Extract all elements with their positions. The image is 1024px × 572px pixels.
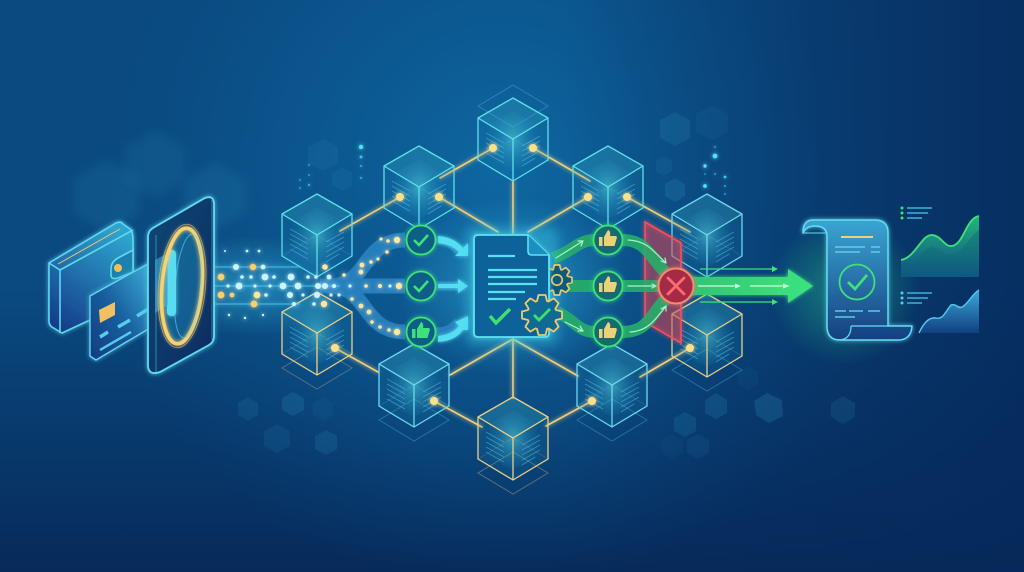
glow along data stream [140,236,360,336]
arrows toward document [438,236,468,342]
blockchain cube: lower left [379,344,449,441]
blockchain cube: outer upper left [282,194,352,277]
icon: document check [490,309,510,323]
icon: payment card [90,260,155,360]
rising data particles: right [703,146,726,195]
payment terminal with gold ring [148,197,214,373]
wallet and card illustration [49,222,155,360]
approval badge: thumbs up 2 [594,272,622,300]
blockchain cube: upper left [384,146,454,229]
blockchain cube: outer upper right [672,194,742,277]
document glow [466,227,558,345]
gold ring [157,226,207,346]
icon: wallet [49,222,133,333]
document [474,235,549,337]
small path arrows [556,240,666,332]
blockchain cube: outer lower left (gold) [282,292,352,389]
icon: receipt check [840,264,874,300]
blue area chart with legend [900,290,979,333]
green glow behind receipt [770,215,920,365]
data particle stream [178,237,402,335]
small gear [542,265,572,295]
side arrows [700,266,778,305]
blockchain cube: upper right [573,146,643,229]
red rejection barrier [645,222,681,343]
network nodes [331,144,694,405]
blockchain cube: lower right [577,344,647,441]
blockchain cube: top [478,85,548,181]
receipt text lines [835,247,880,317]
blockchain cube: bottom (gold) [478,397,548,494]
incoming blue data paths [320,240,458,332]
receipt heading line [841,236,873,238]
approval badge: thumbs up 3 [594,318,622,346]
network connection lines [335,148,690,427]
receipt scroll [803,220,912,340]
text lines [488,256,537,299]
terminal body [148,197,214,373]
main green output arrow [676,266,813,305]
validation badge: check 2 [406,272,436,300]
light beam [167,250,176,316]
approval badge: thumbs up 1 [594,226,622,254]
green approved paths [553,240,672,332]
decorative hexagon field [74,105,855,459]
validation badge: thumbs up green [406,318,436,346]
blockchain cube: outer lower right (gold) [672,294,742,391]
rising data particles: left [299,145,363,189]
inner ring glow [157,226,207,346]
rejection badge: red X [658,268,694,304]
gear with check [522,295,562,335]
green area chart with legend [900,206,979,277]
glow behind document [398,196,628,376]
validation badge: check 1 [406,226,436,254]
